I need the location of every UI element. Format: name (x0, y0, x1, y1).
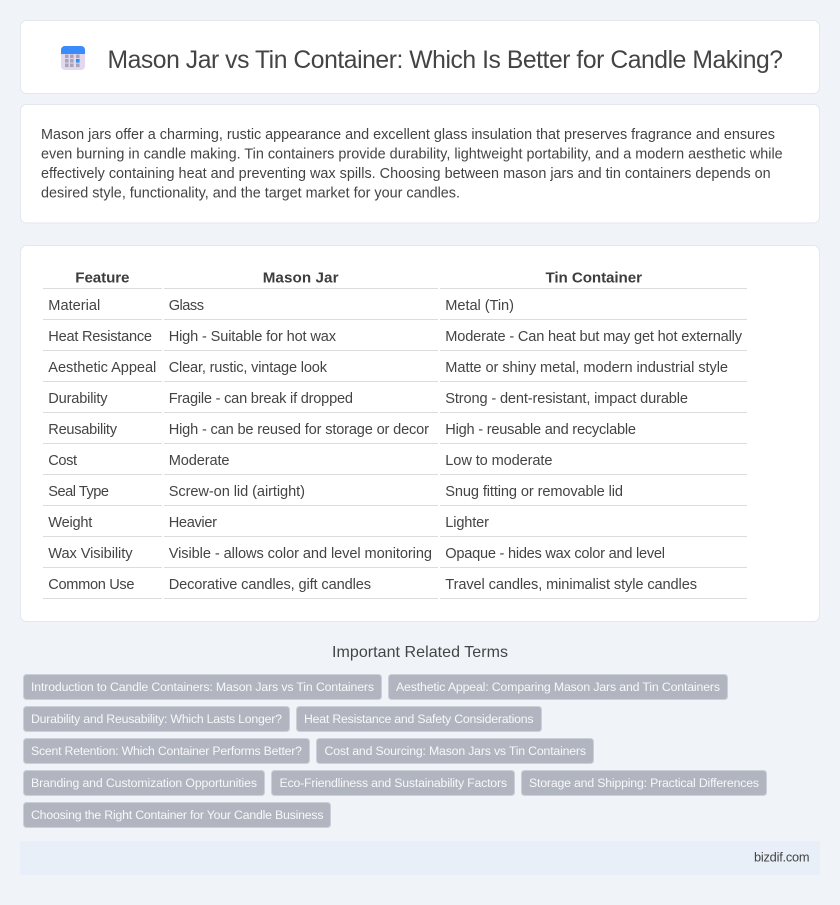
row: material (48, 298, 514, 314)
row: aesthetic appeal (48, 360, 728, 376)
row: wax visibility: Visible - allows color and level monitoring (169, 546, 432, 562)
row: wax visibility: Opaque - hides wax color and level (445, 546, 665, 562)
row: cost: Moderate (169, 453, 230, 469)
row: reusability: High - can be reused for storage or decor (169, 422, 429, 438)
panel: intro paragraph: Mason jars offer a charming, rustic appearance and excellent glass insulation that preserves fragrance and ensures (41, 127, 775, 143)
row: material: Material (48, 298, 100, 314)
footer (20, 841, 820, 875)
row: cost: Cost (48, 453, 77, 469)
footer: bizdif.com (754, 850, 810, 865)
panel: intro paragraph: desired style, functionality, and the target market for your candles. (41, 186, 460, 202)
panel: intro paragraph (20, 104, 820, 223)
table header row: Mason Jar (263, 270, 339, 286)
row: wax visibility (48, 546, 665, 562)
row: weight: Weight (48, 515, 92, 531)
related terms tags: Cost and Sourcing: Mason Jars vs Tin Containers (324, 744, 586, 758)
row: heat resistance: Heat Resistance (48, 329, 152, 345)
table header row: Feature (75, 270, 130, 286)
related terms tags (24, 674, 766, 828)
row: common use: Decorative candles, gift candles (169, 577, 371, 593)
panel: comparison table (20, 246, 820, 622)
row: durability: Fragile - can break if dropped (169, 391, 353, 407)
row: seal type: Seal Type (48, 484, 109, 500)
row: common use: Travel candles, minimalist style candles (445, 577, 697, 593)
row: reusability: High - reusable and recyclable (445, 422, 636, 438)
row: aesthetic appeal: Matte or shiny metal, modern industrial style (445, 360, 728, 376)
row: cost: Low to moderate (445, 453, 552, 469)
row: heat resistance: Moderate - Can heat but may get hot externally (445, 329, 743, 345)
related terms tags: Scent Retention: Which Container Performs Better? (31, 744, 302, 758)
row: seal type: Snug fitting or removable lid (445, 484, 623, 500)
heading: important related terms: Important Related Terms (332, 644, 508, 661)
row: heat resistance (48, 329, 743, 345)
row: common use: Common Use (48, 577, 134, 593)
row: aesthetic appeal: Clear, rustic, vintage look (169, 360, 328, 376)
related terms tags: Branding and Customization Opportunities (31, 776, 257, 790)
related terms tags: Durability and Reusability: Which Lasts Longer? (31, 712, 282, 726)
row: wax visibility: Wax Visibility (48, 546, 133, 562)
row: reusability (48, 422, 636, 438)
row: common use (48, 577, 697, 593)
panel: intro paragraph: even burning in candle making. Tin containers provide durability, lightweight portability, and a modern aesthetic while (41, 146, 783, 162)
related terms tags: Eco-Friendliness and Sustainability Factors (280, 776, 507, 790)
row: heat resistance: High - Suitable for hot wax (169, 329, 337, 345)
related terms tags: Introduction to Candle Containers: Mason Jars vs Tin Containers (31, 680, 374, 694)
row: material: Metal (Tin) (445, 298, 514, 314)
related terms tags: Aesthetic Appeal: Comparing Mason Jars and Tin Containers (396, 680, 720, 694)
row: material: Glass (169, 298, 204, 314)
table header row: Tin Container (546, 270, 642, 286)
related terms tags: Heat Resistance and Safety Considerations (304, 712, 534, 726)
row: seal type (48, 484, 623, 500)
row: weight: Heavier (169, 515, 217, 531)
header panel (20, 20, 820, 94)
related terms tags: Storage and Shipping: Practical Differences (529, 776, 759, 790)
row: weight (48, 515, 489, 531)
panel: intro paragraph: effectively containing heat and preventing wax spills. Choosing between mason jars and tin containers depends on (41, 166, 771, 182)
row: aesthetic appeal: Aesthetic Appeal (48, 360, 156, 376)
title: Mason Jar vs Tin Container: Which Is Better for Candle Making? (108, 47, 783, 74)
table header row (75, 270, 642, 286)
row: reusability: Reusability (48, 422, 118, 438)
row: cost (48, 453, 553, 469)
related terms tags: Choosing the Right Container for Your Candle Business (31, 808, 324, 822)
row: weight: Lighter (445, 515, 489, 531)
row: durability: Durability (48, 391, 108, 407)
icon: calendar (61, 46, 85, 70)
row: seal type: Screw-on lid (airtight) (169, 484, 305, 500)
row: durability (48, 391, 688, 407)
row: durability: Strong - dent-resistant, impact durable (445, 391, 688, 407)
